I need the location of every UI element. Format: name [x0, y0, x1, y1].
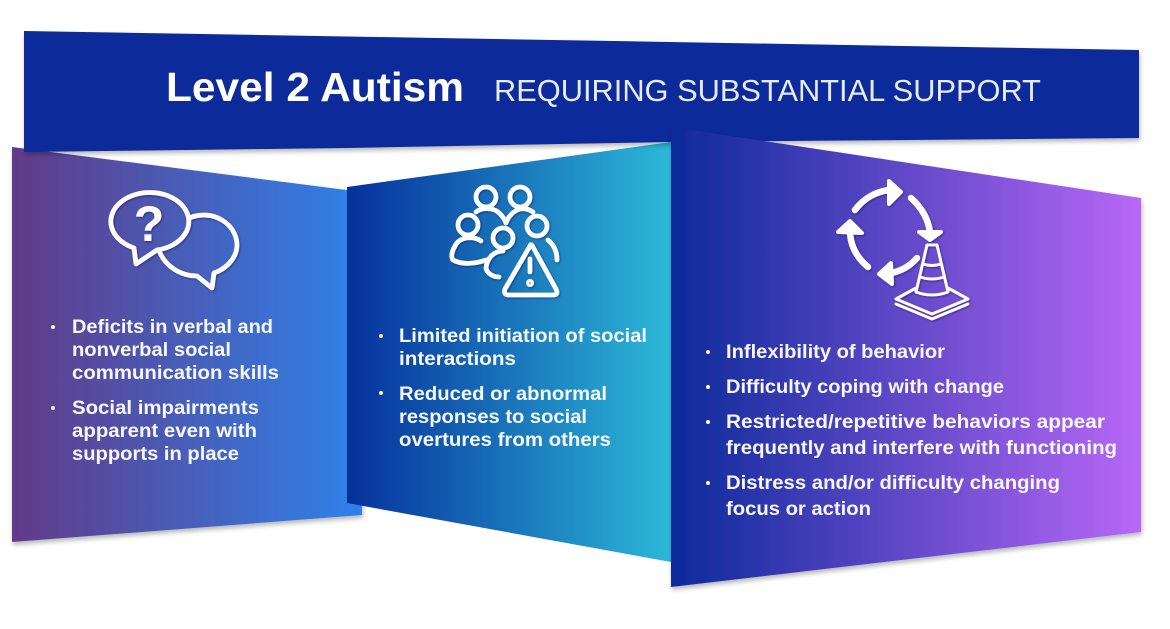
bullet list: social interaction: overtures from others	[399, 430, 611, 451]
banner	[24, 31, 1139, 152]
title: Level 2 Autism	[166, 64, 464, 110]
bullet list: social interaction: interactions	[399, 349, 516, 370]
bullet list: behavior	[706, 342, 1117, 520]
bullet list: social communication: nonverbal social	[72, 340, 231, 361]
bullet list: social interaction: Limited initiation of social	[399, 326, 647, 347]
icon: speech bubbles with question mark	[111, 192, 237, 288]
bullet list: behavior: Restricted/repetitive behaviors appear	[726, 412, 1106, 433]
bullet list: social interaction: responses to social	[399, 407, 587, 428]
bullet list: behavior: focus or action	[726, 499, 871, 520]
panel: social communication	[12, 147, 362, 542]
bullet list: social interaction	[379, 326, 647, 451]
subtitle: REQUIRING SUBSTANTIAL SUPPORT	[494, 73, 1041, 108]
icon: circular arrows with traffic cone	[838, 181, 968, 319]
panel: social interaction	[347, 142, 671, 562]
bullet list: social communication: supports in place	[72, 444, 239, 465]
bullet list: social communication: communication skills	[72, 363, 279, 384]
icon: speech bubbles with question mark: ?	[134, 196, 164, 252]
bullet list: social communication	[51, 317, 279, 465]
bullet list: behavior: Inflexibility of behavior	[726, 342, 946, 363]
bullet list: social communication: Social impairments	[72, 398, 259, 419]
icon: group of people with warning triangle	[452, 187, 557, 295]
bullet list: social communication: Deficits in verbal and	[72, 317, 273, 338]
panel: behavior	[671, 127, 1141, 587]
bullet list: behavior: frequently and interfere with functioning	[726, 438, 1117, 459]
bullet list: behavior: Distress and/or difficulty changing	[726, 473, 1060, 494]
bullet list: social interaction: Reduced or abnormal	[399, 384, 607, 405]
bullet list: behavior: Difficulty coping with change	[726, 377, 1004, 398]
bullet list: social communication: apparent even with	[72, 421, 257, 442]
